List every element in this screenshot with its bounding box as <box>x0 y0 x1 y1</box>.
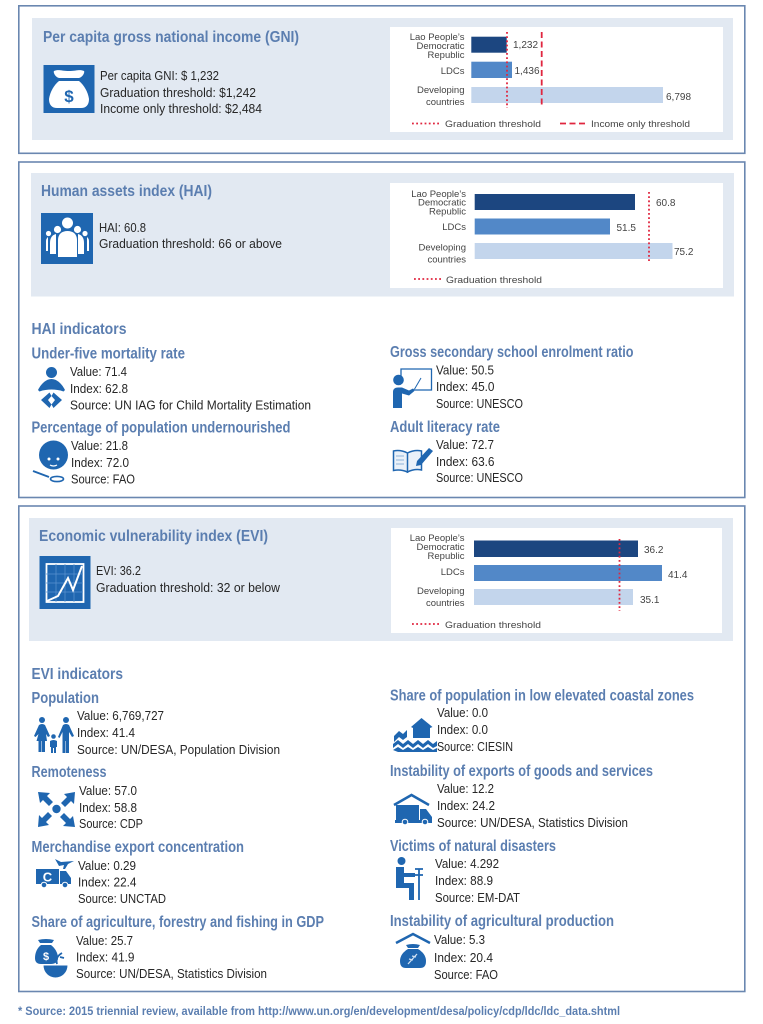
heading: EVI indicators: EVI indicators <box>32 666 123 683</box>
indicator: victims of natural disasters: Value: 4.292 <box>435 856 499 871</box>
bar chart: EVI: 36.2 <box>644 545 664 556</box>
icon: family <box>34 717 74 753</box>
bar chart: EVI: 35.1 <box>640 595 660 606</box>
indicator: merchandise export concentration: Index: 22.4 <box>78 874 136 890</box>
indicator: population undernourished: Percentage of population undernourished <box>32 420 290 437</box>
indicator: instability of exports: Index: 24.2 <box>437 798 495 813</box>
icon: teacher at board <box>393 369 432 408</box>
bar chart: GNI: countries <box>426 97 465 108</box>
indicator: merchandise export concentration: Merchandise export concentration <box>32 839 244 856</box>
text: GNI values: Per capita GNI: $ 1,232 <box>100 68 219 83</box>
indicator: under-five mortality rate: Under-five mortality rate <box>32 346 185 363</box>
indicator: population: Index: 41.4 <box>77 725 135 740</box>
indicator: share of agriculture, forestry and fishing in GDP: Index: 41.9 <box>76 950 134 964</box>
indicator: low elevated coastal zones: Value: 0.0 <box>437 705 488 720</box>
icon: face with spoon <box>33 440 68 482</box>
heading: HAI indicators: HAI indicators <box>32 321 126 338</box>
bar chart: EVI: Developing <box>417 586 464 597</box>
indicator: instability of exports: Source: UN/DESA, Statistics Division <box>437 815 628 830</box>
bar chart: EVI: Republic <box>428 551 465 562</box>
bar chart: HAI: 51.5 <box>616 223 636 234</box>
indicator: remoteness: Remoteness <box>32 764 106 781</box>
indicator: remoteness <box>32 764 143 831</box>
icon: group of people <box>41 213 93 264</box>
indicator: victims of natural disasters: Source: EM-DAT <box>435 890 520 905</box>
bar chart: GNI <box>390 27 723 132</box>
indicator: under-five mortality rate <box>32 346 311 412</box>
indicator: low elevated coastal zones: Share of population in low elevated coastal zones <box>390 688 694 705</box>
icon: line chart <box>40 556 90 609</box>
indicator: gross secondary school enrolment ratio: Value: 50.5 <box>436 362 494 378</box>
indicator: population undernourished: Source: FAO <box>71 472 135 486</box>
bar chart: HAI: LDCs <box>442 222 466 233</box>
bar chart: HAI: countries <box>427 254 466 266</box>
indicator: share of agriculture, forestry and fishing in GDP: Source: UN/DESA, Statistics Division <box>76 966 267 981</box>
heading: GNI: Per capita gross national income (GNI) <box>43 29 299 46</box>
indicator: remoteness: Index: 58.8 <box>79 800 137 815</box>
text: HAI values <box>99 220 282 251</box>
indicator: victims of natural disasters: Index: 88.9 <box>435 873 493 888</box>
icon: arrows spreading from a centre <box>38 792 75 827</box>
icon: truck and plane: C <box>43 870 53 884</box>
indicator: instability of exports: Value: 12.2 <box>437 781 494 796</box>
indicator: share of agriculture, forestry and fishing in GDP: Value: 25.7 <box>76 933 133 948</box>
indicator: instability of exports: Instability of exports of goods and services <box>390 763 653 780</box>
icon: money bag: $ <box>64 87 74 106</box>
text: GNI values <box>100 68 262 116</box>
indicator: adult literacy rate <box>390 419 523 485</box>
bar chart: GNI: Developing <box>417 85 464 96</box>
panel: economic vulnerability index <box>19 506 745 992</box>
icon: grain sack under roof <box>396 934 430 968</box>
indicator: population undernourished: Index: 72.0 <box>71 455 129 470</box>
bar chart: GNI: Republic <box>428 50 465 61</box>
indicator: instability of agricultural production: Value: 5.3 <box>434 932 485 947</box>
indicator: low elevated coastal zones <box>390 688 694 754</box>
bar chart: EVI: Democratic <box>416 542 465 553</box>
bar chart: EVI: countries <box>426 598 465 609</box>
bar chart: GNI: 1,232 <box>513 40 538 51</box>
indicator: gross secondary school enrolment ratio: Gross secondary school enrolment ratio <box>390 344 634 361</box>
indicator: population: Value: 6,769,727 <box>77 708 164 723</box>
icon: truck and plane <box>36 859 74 888</box>
panel: per capita GNI <box>19 6 745 153</box>
icon: money bag and bowl: $ <box>43 951 49 963</box>
panel: human assets index <box>19 162 745 498</box>
text: GNI values: Income only threshold: $2,484 <box>100 101 262 116</box>
bar chart: HAI: Developing <box>418 242 466 254</box>
indicator: population <box>32 690 280 757</box>
bar chart: GNI: Lao People’s <box>410 32 465 43</box>
bar chart: GNI: 1,436 <box>514 66 540 77</box>
text: EVI values: Graduation threshold: 32 or below <box>96 580 281 595</box>
bar chart: EVI: Graduation threshold <box>445 620 541 631</box>
indicator: instability of agricultural production: Index: 20.4 <box>434 950 493 965</box>
bar chart: GNI: Democratic <box>416 41 465 52</box>
bar chart: HAI: 60.8 <box>656 198 676 209</box>
indicator: instability of agricultural production: Instability of agricultural production <box>390 913 614 930</box>
indicator: under-five mortality rate: Source: UN IAG for Child Mortality Estimation <box>70 398 311 412</box>
bar chart: GNI: LDCs <box>441 66 465 77</box>
indicator: share of agriculture, forestry and fishing in GDP: Share of agriculture, forestry and fishing in GDP <box>32 914 324 931</box>
text: GNI values: Graduation threshold: $1,242 <box>100 85 256 100</box>
indicator: merchandise export concentration: Source: UNCTAD <box>78 891 166 906</box>
bar chart: GNI: 6,798 <box>666 92 691 103</box>
indicator: remoteness: Value: 57.0 <box>79 783 137 798</box>
bar chart: HAI <box>390 183 723 288</box>
icon: money bag <box>44 65 94 113</box>
text: EVI values <box>96 563 281 595</box>
indicator: merchandise export concentration: Value: 0.29 <box>78 858 136 873</box>
bar chart: EVI: 41.4 <box>668 570 688 581</box>
bar chart: HAI: Republic <box>429 206 466 218</box>
indicator: instability of agricultural production <box>390 913 614 982</box>
heading: EVI: Economic vulnerability index (EVI) <box>39 528 268 545</box>
indicator: adult literacy rate: Source: UNESCO <box>436 470 523 485</box>
icon: baby <box>38 367 65 408</box>
indicator: adult literacy rate: Value: 72.7 <box>436 437 494 452</box>
bar chart: GNI: Income only threshold <box>591 119 690 130</box>
icon: book and pen <box>394 448 433 472</box>
indicator: share of agriculture, forestry and fishing in GDP <box>32 914 324 981</box>
bar chart: HAI: Graduation threshold <box>446 275 542 286</box>
bar chart: EVI: Lao People’s <box>410 533 465 544</box>
indicator: adult literacy rate: Adult literacy rate <box>390 419 500 436</box>
indicator: population undernourished: Value: 21.8 <box>71 438 128 453</box>
bar chart: EVI <box>391 528 722 633</box>
indicator: population: Population <box>32 690 99 707</box>
indicator: instability of agricultural production: Source: FAO <box>434 967 498 982</box>
text: HAI values: HAI: 60.8 <box>99 220 146 235</box>
bar chart: EVI: LDCs <box>441 567 465 578</box>
indicator: victims of natural disasters: Victims of natural disasters <box>390 838 556 855</box>
bar chart: HAI: Lao People’s <box>411 189 466 200</box>
indicator: under-five mortality rate: Value: 71.4 <box>70 364 127 379</box>
icon: seated person with crutch <box>396 857 423 900</box>
indicator: population undernourished <box>32 420 290 486</box>
bar chart: HAI: Democratic <box>418 198 466 209</box>
indicator: gross secondary school enrolment ratio: Source: UNESCO <box>436 396 523 411</box>
indicator: under-five mortality rate: Index: 62.8 <box>70 381 128 396</box>
indicator: low elevated coastal zones: Source: CIESIN <box>437 739 513 754</box>
indicator: instability of exports <box>390 763 653 830</box>
icon: truck under roof <box>394 795 432 825</box>
indicator: gross secondary school enrolment ratio: Index: 45.0 <box>436 379 494 394</box>
indicator: population: Source: UN/DESA, Population Division <box>77 742 280 757</box>
indicator: merchandise export concentration <box>32 839 244 906</box>
text: HAI values: Graduation threshold: 66 or above <box>99 236 282 251</box>
indicator: adult literacy rate: Index: 63.6 <box>436 454 494 469</box>
text: EVI values: EVI: 36.2 <box>96 563 141 578</box>
indicator: gross secondary school enrolment ratio <box>390 344 634 411</box>
indicator: low elevated coastal zones: Index: 0.0 <box>437 722 488 737</box>
icon: house in waves <box>393 718 437 752</box>
icon: money bag and bowl <box>35 939 68 978</box>
bar chart: HAI: 75.2 <box>674 247 694 258</box>
indicator: remoteness: Source: CDP <box>79 816 143 831</box>
footnote: source: * Source: 2015 triennial review, available from http://www.un.org/en/development/desa/policy/cdp/ldc/ldc_data.shtml <box>18 1006 620 1018</box>
heading: HAI: Human assets index (HAI) <box>41 183 212 200</box>
indicator: victims of natural disasters <box>390 838 556 905</box>
bar chart: GNI: Graduation threshold <box>445 119 541 130</box>
